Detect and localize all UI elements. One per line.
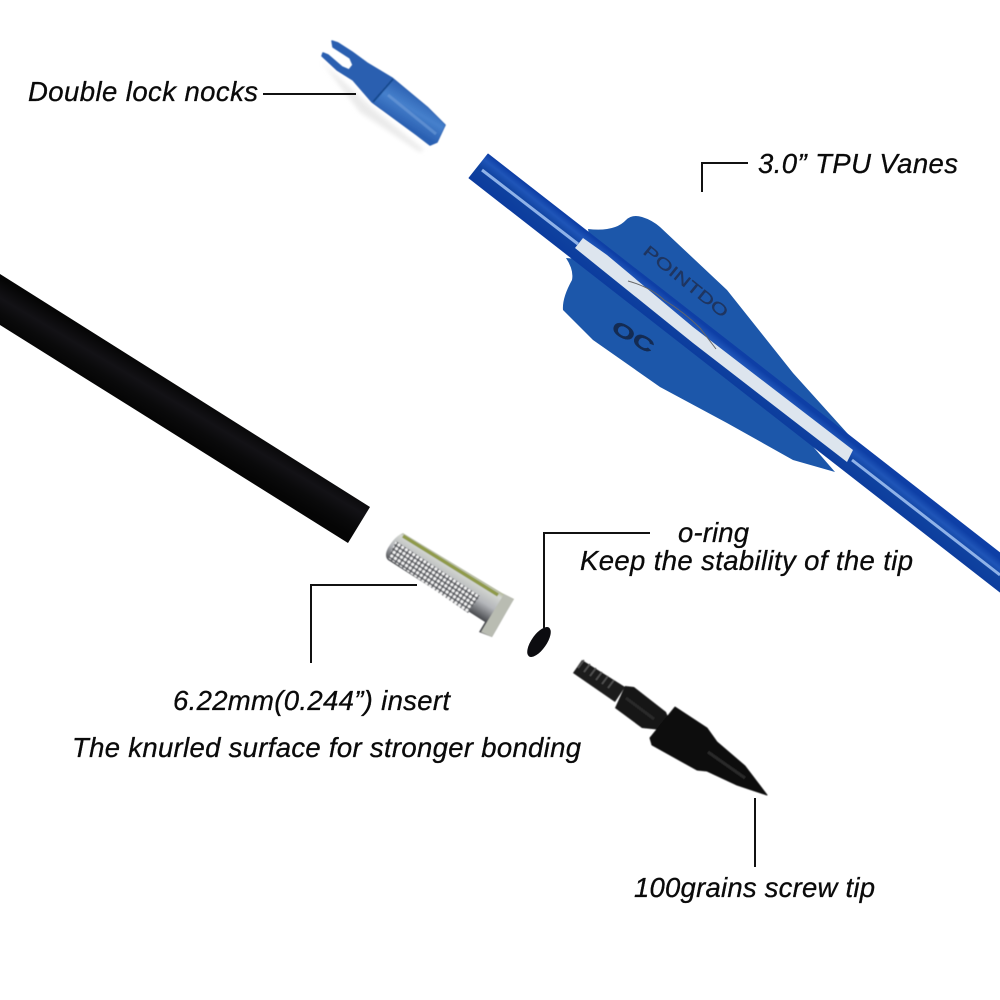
upper vane [588, 216, 857, 444]
callout: screw tip: 100grains screw tip [634, 872, 875, 903]
nock [322, 41, 445, 152]
callout: o-ring: Keep the stability of the tip [580, 545, 913, 576]
callout: insert [72, 585, 582, 763]
callout: insert: The knurled surface for stronger bonding [72, 732, 582, 763]
screw tip [573, 660, 767, 795]
wrap signature [628, 281, 716, 349]
callout: vanes: 3.0” TPU Vanes [758, 148, 958, 179]
knurled area [388, 541, 480, 613]
callout: o-ring: o-ring [678, 517, 750, 548]
vane text 3D: OC [608, 317, 658, 359]
o-ring [523, 623, 555, 661]
insert body [386, 533, 514, 637]
upper blue arrow shaft and vanes [469, 154, 1000, 592]
vane text POINTDO: POINTDO [639, 243, 731, 322]
callout: o-ring [544, 517, 913, 628]
insert [386, 533, 514, 637]
white wrap strip [575, 238, 853, 462]
callout: insert: 6.22mm(0.244”) insert [173, 685, 451, 716]
black carbon shaft [0, 274, 370, 543]
shaft [469, 154, 1000, 592]
lower vane [563, 258, 835, 472]
highlight lines [482, 170, 1000, 575]
callout: vanes [702, 148, 958, 192]
callout: nocks: Double lock nocks [28, 76, 258, 107]
